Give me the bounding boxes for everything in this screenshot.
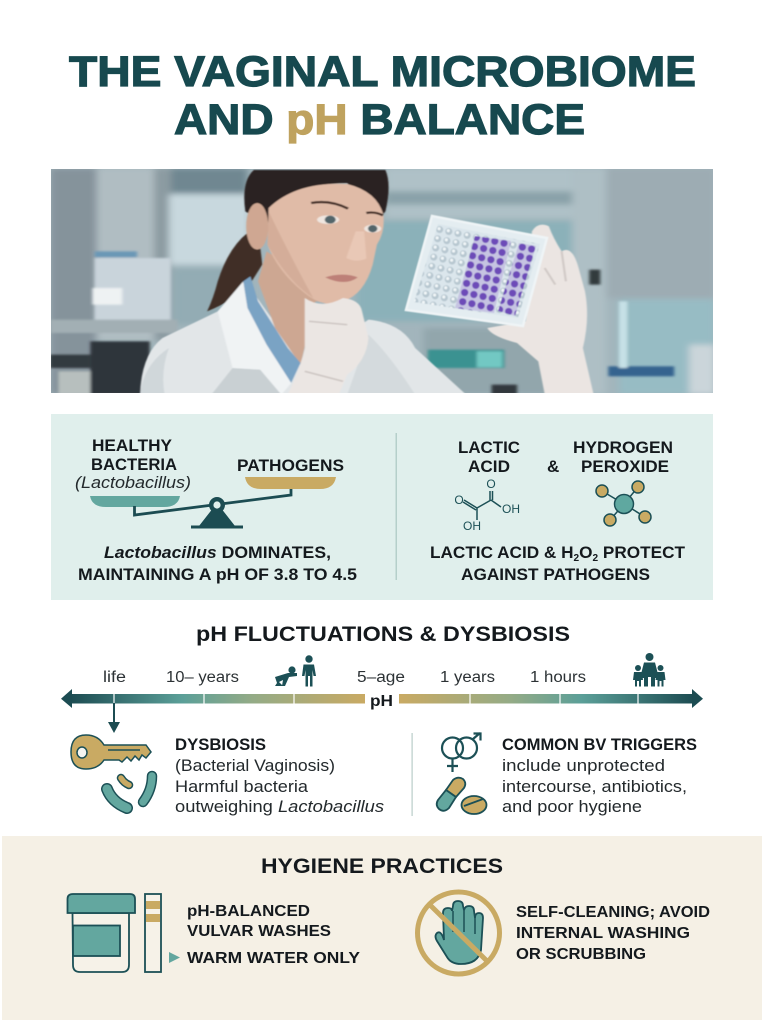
icon: specimen jar: [68, 894, 135, 972]
icon: balance scale: [90, 477, 336, 528]
healthy bacteria label: [75, 436, 191, 492]
panel: balance and protective acids: [51, 414, 713, 600]
icon: crawling baby and adult: [275, 655, 316, 686]
caption: lactobacillus dominates: MAINTAINING A pH OF 3.8 TO 4.5: [78, 565, 357, 584]
text: dysbiosis: DYSBIOSIS: [175, 736, 266, 754]
icon: family: [633, 653, 666, 686]
icon: gender symbols: [442, 733, 480, 772]
text: dysbiosis: (Bacterial Vaginosis): [175, 757, 335, 775]
ampersand: &: [547, 457, 559, 476]
icon: lactic acid molecule: O: [486, 477, 496, 491]
text: self-cleaning: SELF-CLEANING; AVOID: [516, 904, 710, 921]
timeline labels: [103, 669, 586, 686]
face: [267, 184, 384, 304]
text: common BV triggers: [502, 736, 697, 816]
icon: no hand: [418, 892, 500, 974]
text: washes: pH-BALANCED: [187, 903, 310, 920]
text: common BV triggers: intercourse, antibiotics,: [502, 778, 687, 796]
text: self-cleaning: INTERNAL WASHING: [516, 925, 690, 942]
shirt: [243, 276, 301, 383]
caption: lactic acid and hydrogen peroxide protect: AGAINST PATHOGENS: [461, 565, 650, 584]
timeline: pH scale: [61, 653, 703, 710]
healthy bacteria label: (Lactobacillus): [75, 473, 191, 492]
icon: lactic acid molecule: OH: [502, 502, 520, 516]
title: [69, 48, 696, 144]
timeline labels: 1 years: [440, 669, 495, 686]
caption: lactobacillus dominates: [78, 543, 357, 584]
hydrogen peroxide label: PEROXIDE: [581, 457, 669, 476]
heading: hygiene practices: HYGIENE PRACTICES: [261, 855, 503, 878]
healthy bacteria label: HEALTHY: [92, 436, 173, 455]
hydrogen peroxide label: HYDROGEN: [573, 438, 673, 457]
icon: lactic acid molecule: OH: [463, 519, 481, 533]
icon: lactic acid molecule: [454, 477, 520, 533]
timeline labels: life: [103, 669, 126, 686]
arrow: down to dysbiosis: [108, 703, 120, 733]
neck: [258, 252, 318, 364]
icon: triangle bullet: [169, 952, 180, 963]
text: washes: WARM WATER ONLY: [187, 950, 360, 967]
icon: test strip: [145, 894, 161, 972]
text: common BV triggers: include unprotected: [502, 757, 665, 775]
timeline labels: 5–age: [357, 669, 405, 686]
right hand glove: [487, 225, 593, 394]
icon: lactic acid molecule: O: [454, 493, 464, 507]
icon: bacteria: [107, 776, 152, 808]
collar: [218, 281, 291, 395]
healthy bacteria label: BACTERIA: [91, 455, 177, 474]
text: washes: VULVAR WASHES: [187, 923, 331, 940]
caption: lactic acid and hydrogen peroxide protect: [430, 543, 686, 584]
text: self-cleaning: [516, 904, 710, 963]
caption: lactobacillus dominates: Lactobacillus DOMINATES,: [104, 543, 331, 562]
caption: lactic acid and hydrogen peroxide protect: O: [579, 543, 592, 562]
caption: lactic acid and hydrogen peroxide protect: LACTIC ACID & H: [430, 543, 572, 562]
lactic acid label: [458, 438, 520, 476]
caption: lactic acid and hydrogen peroxide protect: 2: [573, 553, 580, 564]
title: THE VAGINAL MICROBIOME: [69, 48, 696, 96]
hair: [244, 170, 389, 225]
caption: lactic acid and hydrogen peroxide protect: 2: [592, 553, 599, 564]
text: common BV triggers: COMMON BV TRIGGERS: [502, 736, 697, 754]
lactic acid label: ACID: [468, 457, 510, 476]
text: dysbiosis: [175, 736, 384, 816]
hydrogen peroxide label: [573, 438, 673, 476]
caption: lactic acid and hydrogen peroxide protect: PROTECT: [598, 543, 686, 562]
text: common BV triggers: and poor hygiene: [502, 798, 642, 816]
icon: key: [71, 735, 151, 769]
icon: pill and tablet: [437, 778, 486, 814]
timeline labels: 1 hours: [530, 669, 586, 686]
title: AND pH BALANCE: [174, 96, 585, 144]
heading: pH fluctuations: pH FLUCTUATIONS & DYSBIOSIS: [196, 623, 570, 646]
pH gradient arrow: [61, 689, 703, 708]
ponytail: [207, 233, 262, 311]
text: dysbiosis: Harmful bacteria: [175, 778, 309, 796]
facial features: [311, 202, 383, 215]
photo: scientist examining a well plate: [50, 168, 715, 395]
lactic acid label: LACTIC: [458, 438, 520, 457]
text: self-cleaning: OR SCRUBBING: [516, 946, 646, 963]
panel: hygiene practices: [2, 836, 762, 1020]
icon: hydrogen peroxide molecule: [596, 481, 651, 526]
pH marker: pH: [370, 693, 393, 710]
text: washes: [187, 903, 360, 967]
text: dysbiosis: outweighing Lactobacillus: [175, 798, 384, 816]
pathogens label: PATHOGENS: [237, 456, 344, 475]
timeline labels: 10– years: [166, 669, 239, 686]
left fist glove: [288, 298, 368, 395]
well plate: [406, 216, 547, 326]
lab coat: [140, 281, 466, 395]
